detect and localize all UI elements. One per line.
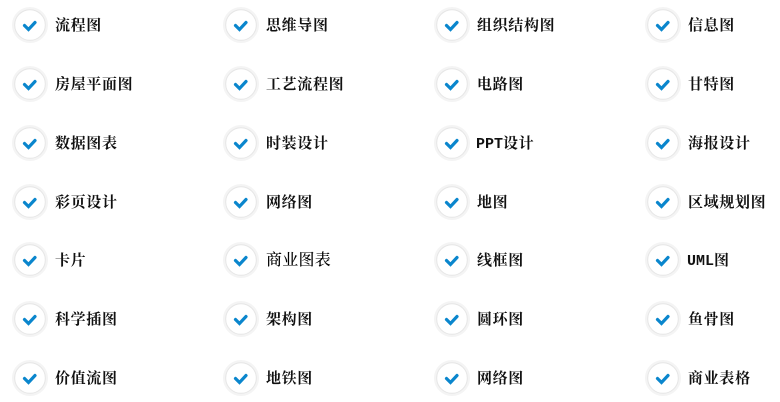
- item: UML图: UML图: [687, 253, 730, 270]
- item: UML图: [645, 242, 730, 278]
- item: 商业图表: 商业图表: [266, 252, 331, 269]
- item: 鱼骨图: [645, 301, 735, 337]
- item: 彩页设计: [12, 184, 118, 220]
- item: 流程图: [12, 7, 102, 43]
- item: 卡片: 卡片: [55, 253, 86, 269]
- item: 区域规划图: [645, 184, 766, 220]
- item: 架构图: 架构图: [266, 312, 313, 328]
- item: 时装设计: [223, 125, 329, 161]
- item: 地铁图: [223, 360, 313, 396]
- item: 网络图: [434, 360, 524, 396]
- item: 思维导图: [223, 7, 329, 43]
- item: 区域规划图: 区域规划图: [688, 195, 766, 211]
- item: 科学插图: [12, 301, 118, 337]
- item: 海报设计: [645, 125, 751, 161]
- item: 房屋平面图: [12, 66, 133, 102]
- item: 房屋平面图: 房屋平面图: [55, 77, 133, 93]
- item: 时装设计: 时装设计: [266, 136, 329, 152]
- item: 鱼骨图: 鱼骨图: [688, 312, 735, 328]
- item: 架构图: [223, 301, 313, 337]
- item: 甘特图: 甘特图: [688, 77, 735, 93]
- item: 电路图: [434, 66, 524, 102]
- item: 组织结构图: 组织结构图: [477, 18, 555, 34]
- item: 卡片: [12, 242, 86, 278]
- item: 信息图: [645, 7, 735, 43]
- item: 地图: 地图: [477, 195, 508, 211]
- item: 线框图: 线框图: [477, 253, 524, 269]
- item: 价值流图: 价值流图: [55, 371, 118, 387]
- item: 地铁图: 地铁图: [266, 371, 313, 387]
- item: 工艺流程图: [223, 66, 344, 102]
- item: 数据图表: [12, 125, 118, 161]
- item: 地图: [434, 184, 508, 220]
- item: 圆环图: 圆环图: [477, 312, 524, 328]
- item: 线框图: [434, 242, 524, 278]
- item: 商业表格: 商业表格: [688, 371, 751, 387]
- item: 圆环图: [434, 301, 524, 337]
- item: 网络图: [223, 184, 313, 220]
- item: 信息图: 信息图: [688, 18, 735, 34]
- item: 网络图: 网络图: [477, 371, 524, 387]
- item: 电路图: 电路图: [477, 77, 524, 93]
- item: 彩页设计: 彩页设计: [55, 195, 118, 211]
- item: 流程图: 流程图: [55, 18, 102, 34]
- item: 组织结构图: [434, 7, 555, 43]
- item: PPT设计: PPT设计: [476, 136, 534, 153]
- item: 数据图表: 数据图表: [55, 136, 118, 152]
- item: 商业表格: [645, 360, 751, 396]
- item: 价值流图: [12, 360, 118, 396]
- item: 网络图: 网络图: [266, 195, 313, 211]
- item: PPT设计: [434, 125, 534, 161]
- item: 思维导图: 思维导图: [266, 18, 329, 34]
- item: 海报设计: 海报设计: [688, 136, 751, 152]
- item: 工艺流程图: 工艺流程图: [266, 77, 344, 93]
- item: 甘特图: [645, 66, 735, 102]
- item: 商业图表: [223, 242, 331, 278]
- item: 科学插图: 科学插图: [55, 312, 118, 328]
